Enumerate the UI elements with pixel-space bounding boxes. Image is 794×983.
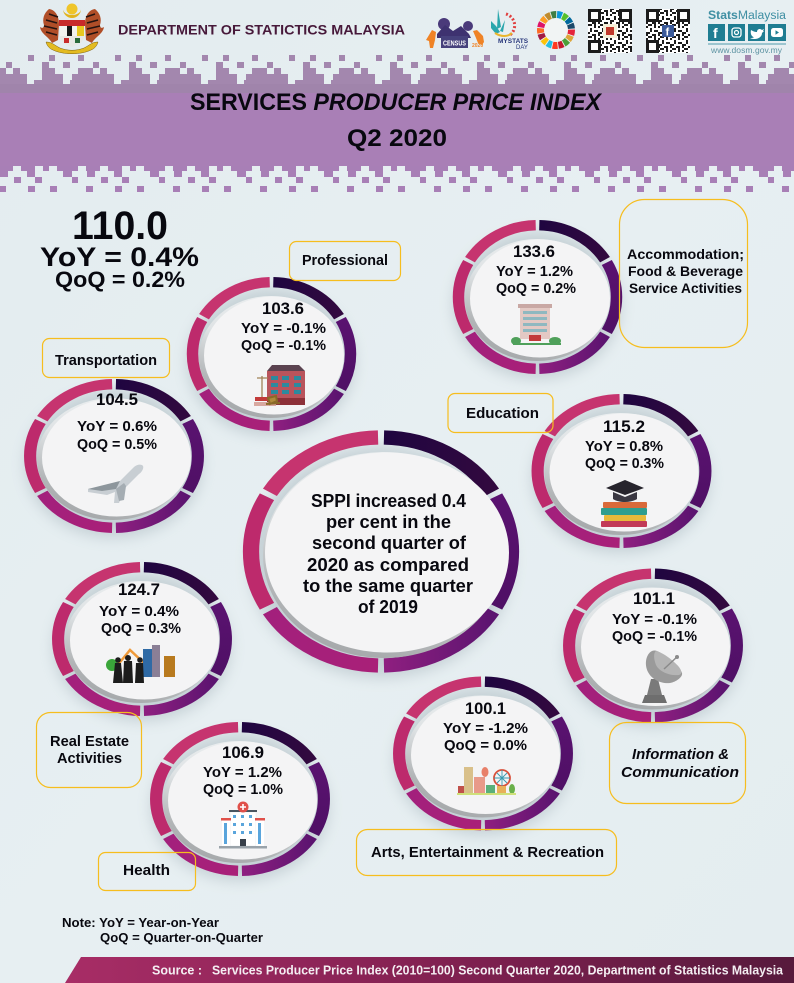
panel: transportation: YoY = 0.6%: [77, 418, 157, 435]
label: real estate: Activities: [57, 750, 122, 767]
note: [62, 916, 263, 945]
headline index figures: YoY = 0.4%: [40, 242, 199, 272]
headline index figures: 110.0: [72, 204, 168, 248]
icon: hotel: [511, 304, 561, 345]
panel: information and communication: 101.1: [633, 589, 675, 608]
panel: education: QoQ = 0.3%: [585, 455, 664, 472]
label: education: Education: [466, 405, 539, 422]
label: information and communication: Communication: [621, 764, 739, 781]
label: accommodation: [620, 200, 748, 348]
label: accommodation: Accommodation;: [627, 246, 744, 262]
panel: real estate: YoY = 0.4%: [99, 603, 179, 620]
label: education: [448, 394, 553, 432]
headline index figures: QoQ = 0.2%: [55, 267, 185, 292]
panel: accommodation: [453, 225, 621, 379]
panel: education: 115.2: [603, 417, 645, 436]
label: information and communication: Information &: [632, 746, 729, 763]
central text: per cent in the: [326, 512, 451, 532]
title: SERVICES PRODUCER PRICE INDEX: [190, 89, 603, 116]
label: health: [98, 852, 196, 890]
subtitle: Q2 2020: [347, 125, 447, 152]
panel: arts: YoY = -1.2%: [443, 720, 528, 737]
note: QoQ = Quarter-on-Quarter: [100, 931, 263, 945]
label: real estate: [36, 712, 142, 788]
logo: MyStats Day: [491, 9, 529, 51]
label: professional: [290, 242, 400, 280]
central text: to the same quarter: [303, 576, 473, 596]
central text: SPPI increased 0.4: [311, 491, 466, 511]
panel: arts: QoQ = 0.0%: [444, 737, 527, 754]
title band: [0, 55, 794, 194]
note: Note: YoY = Year-on-Year: [62, 916, 219, 930]
label: professional: Professional: [302, 252, 388, 269]
logo: MyStats Day: MYSTATS: [498, 38, 529, 45]
panel: accommodation: YoY = 1.2%: [496, 263, 573, 280]
panel: professional: 103.6: [262, 299, 304, 318]
StatsMalaysia social block: StatsMalaysia: [708, 10, 787, 22]
panel: transportation: QoQ = 0.5%: [77, 436, 157, 453]
central text: of 2019: [358, 597, 418, 617]
central text: [303, 491, 473, 617]
panel: arts: 100.1: [465, 699, 506, 718]
header: department name: DEPARTMENT OF STATICTICS MALAYSIA: [118, 22, 405, 38]
label: accommodation: Food & Beverage: [628, 263, 743, 279]
QR code: facebook: [646, 9, 690, 53]
icon: hospital: [219, 802, 267, 848]
label: real estate: Real Estate: [50, 733, 129, 750]
logo: MyStats Day: DAY: [516, 45, 528, 51]
panel: health: QoQ = 1.0%: [203, 781, 283, 798]
label: transportation: Transportation: [55, 352, 157, 369]
icon: law firm building: [254, 365, 305, 406]
central text: second quarter of: [312, 533, 467, 553]
icon: books and mortarboard: [601, 480, 647, 527]
panel: professional: QoQ = -0.1%: [241, 337, 326, 354]
panel: real estate: 124.7: [118, 580, 160, 599]
logo: census 2020: [426, 18, 484, 49]
panel: professional: YoY = -0.1%: [241, 320, 326, 337]
icon: satellite dish: [642, 651, 682, 703]
label: information and communication: [610, 722, 746, 804]
panel: transportation: [25, 384, 203, 538]
panel: arts: [394, 682, 572, 835]
panel: information and communication: [564, 574, 742, 727]
central text: 2020 as compared: [307, 555, 469, 575]
label: health: Health: [123, 862, 170, 879]
icon: amusement park: [457, 767, 516, 795]
panel: education: YoY = 0.8%: [585, 438, 663, 455]
headline index figures: [40, 204, 199, 292]
logo: SDG wheel: [540, 14, 572, 46]
panel: health: [151, 727, 329, 881]
logo: census 2020: CENSUS: [443, 40, 466, 48]
panel: information and communication: YoY = -0.1%: [612, 611, 697, 628]
icon: airplane: [88, 465, 143, 503]
StatsMalaysia social block: [708, 10, 787, 55]
panel: central summary: [249, 438, 513, 678]
QR code: portal: [588, 9, 632, 53]
label: arts: Arts, Entertainment & Recreation: [371, 844, 604, 861]
panel: transportation: 104.5: [96, 390, 138, 409]
header: crest of Malaysia: [40, 4, 104, 54]
StatsMalaysia social block: www.dosm.gov.my: [710, 45, 783, 55]
panel: health: 106.9: [222, 743, 264, 762]
label: transportation: [42, 338, 170, 378]
panel: information and communication: QoQ = -0.1%: [612, 628, 697, 645]
QR code: facebook: f: [666, 26, 670, 38]
panel: real estate: [53, 567, 231, 721]
panel: education: [532, 399, 710, 553]
source bar: [65, 957, 794, 983]
panel: professional: [187, 282, 355, 436]
logo: census 2020: 2020: [472, 43, 483, 49]
label: accommodation: Service Activities: [629, 280, 742, 296]
label: arts: [356, 830, 616, 876]
source bar: Source :: [152, 962, 202, 978]
panel: real estate: QoQ = 0.3%: [101, 620, 181, 637]
panel: accommodation: QoQ = 0.2%: [496, 280, 576, 297]
StatsMalaysia social block: f: [713, 25, 718, 41]
icon: property agents: [106, 645, 175, 683]
panel: health: YoY = 1.2%: [203, 764, 282, 781]
panel: accommodation: 133.6: [513, 242, 555, 261]
